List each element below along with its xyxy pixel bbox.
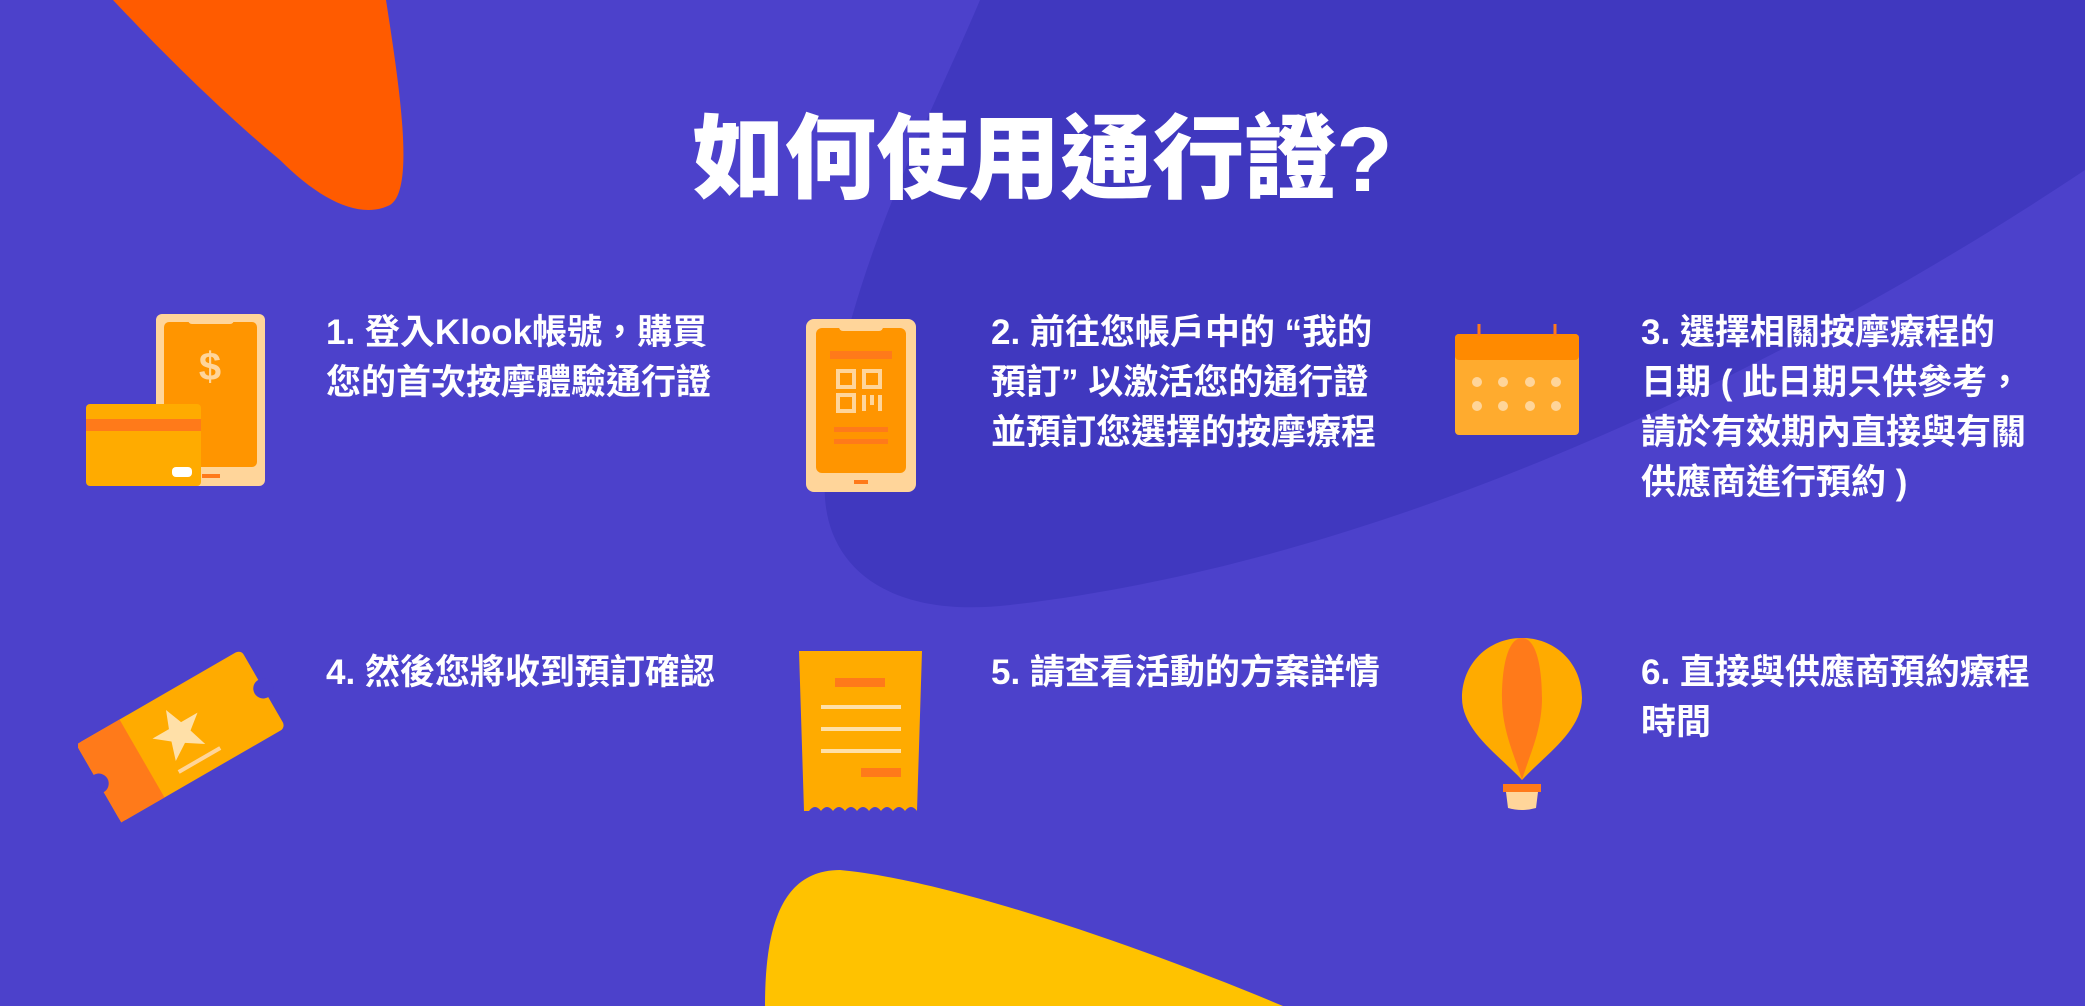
text: step 1: 1. 登入Klook帳號，購買	[326, 313, 707, 352]
icon: phone and card	[86, 314, 265, 486]
title: 如何使用通行證?	[692, 109, 1393, 211]
text: step 4: 4. 然後您將收到預訂確認	[326, 653, 715, 692]
text: step 2: 並預訂您選擇的按摩療程	[991, 413, 1376, 452]
text: step 3: 供應商進行預約 )	[1641, 463, 1907, 502]
icon: ticket	[78, 652, 284, 822]
text: step 6: 6. 直接與供應商預約療程	[1641, 653, 2030, 692]
icon: phone and card: $	[199, 345, 221, 389]
text: step 3	[1641, 313, 2026, 502]
text: step 1: 您的首次按摩體驗通行證	[326, 363, 711, 402]
icon: hot air balloon	[1462, 638, 1582, 810]
text: step 6	[1641, 653, 2030, 742]
icon: phone with QR code	[806, 319, 916, 492]
text: step 2: 2. 前往您帳戶中的 “我的	[991, 313, 1372, 352]
text: step 6: 時間	[1641, 703, 1711, 742]
text: step 3: 日期 ( 此日期只供參考，	[1641, 363, 2022, 402]
text: step 3: 3. 選擇相關按摩療程的	[1641, 313, 1995, 352]
text: step 2	[991, 313, 1376, 452]
text: step 1	[326, 313, 711, 402]
icon: calendar	[1455, 324, 1579, 435]
text: step 5: 5. 請查看活動的方案詳情	[991, 653, 1380, 692]
text: step 2: 預訂” 以激活您的通行證	[991, 363, 1368, 402]
icon: receipt	[799, 651, 922, 811]
text: step 3: 請於有效期內直接與有關	[1641, 413, 2026, 452]
